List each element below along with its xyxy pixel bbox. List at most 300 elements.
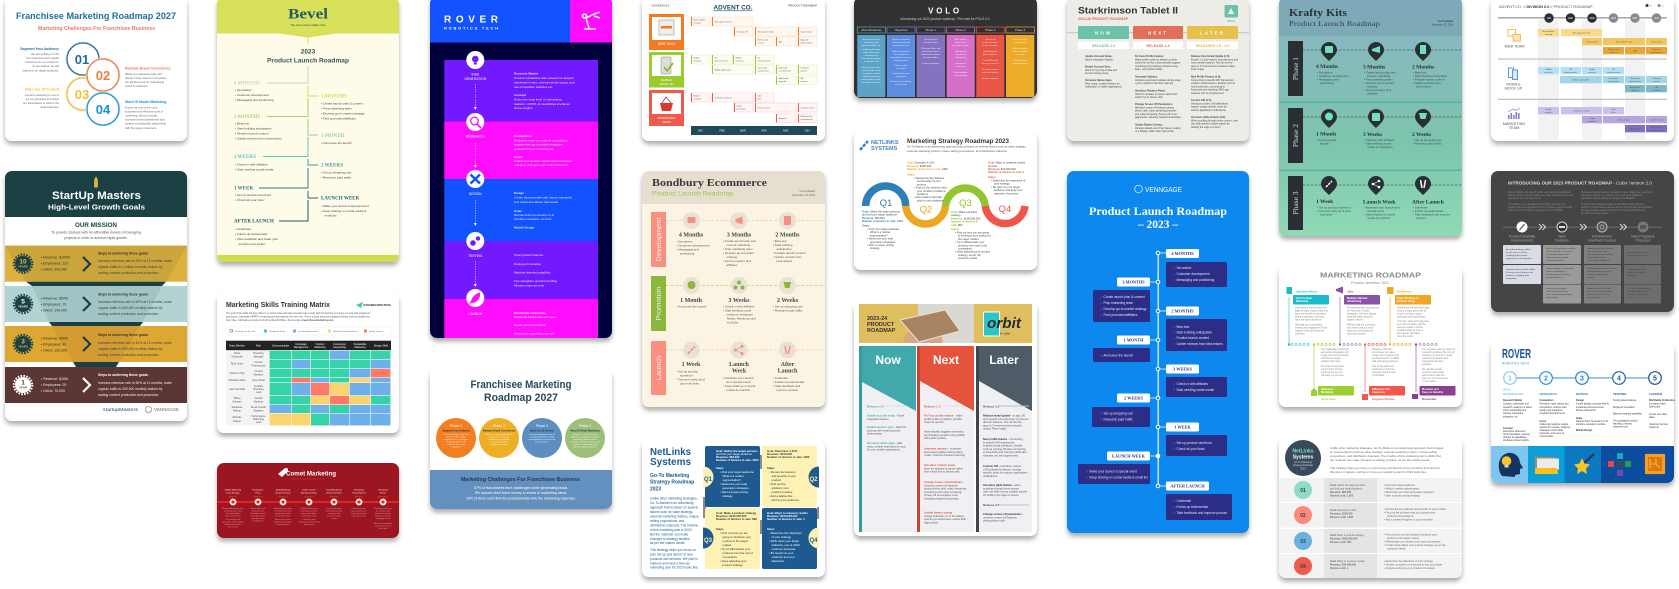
Q3 text: customer needs. (958, 256, 978, 260)
column: now (859, 346, 916, 532)
milestone bullets: • Celebrate (1413, 206, 1428, 210)
matrix table: Dolores Virgil (230, 372, 245, 375)
team label: marketing: TEAM (1509, 126, 1519, 130)
gantt labels: Bug and (1653, 49, 1661, 51)
panel: Volo phases: Objectives (894, 28, 908, 32)
lower text: products, as well as in-depth (1422, 354, 1453, 357)
Q4 text: audience and keep your (994, 188, 1023, 192)
upper text: and get reviews, content (1397, 326, 1423, 329)
month axis: APR (761, 128, 767, 132)
Q2 text: problems. (917, 192, 929, 196)
milestone details: operations and marketing (222, 520, 244, 524)
phase circles: Word Of Mouth Marketing (570, 430, 600, 432)
column text: roadmap phase (1012, 62, 1028, 65)
task labels: Revamp UX (736, 32, 748, 34)
stage text: of Eden AI capabilities (1503, 436, 1527, 439)
upper text: Viral content can be easily the (1295, 306, 1328, 310)
icon: robot arm (582, 12, 600, 29)
milestone bullets: email list (324, 214, 337, 218)
steps text: • What is market segmentation (1384, 486, 1420, 490)
matrix table: Performance (251, 415, 266, 418)
panel: Venngage product launch roadmap: 4 MONTHS (1171, 251, 1194, 256)
gantt labels: Automate (1631, 77, 1640, 80)
panel: Bondbury Ecommerce roadmap (642, 171, 825, 407)
column: next: and tracking contacts using CRMs (924, 433, 965, 437)
milestone headings (679, 232, 800, 374)
task box text: ✓ Set up shopping cart (1100, 412, 1133, 416)
stage text: design and marketing (1540, 409, 1563, 412)
upper text: improved product. (1347, 332, 1366, 336)
feature box text: and module. (1546, 297, 1558, 299)
map pins (1321, 42, 1431, 195)
column text: to our platform (894, 53, 908, 56)
task box text: ✓ Customer development (1173, 272, 1210, 276)
stage text: use competition statistics etc. (514, 85, 553, 89)
column text: now: notification on native applications. (1085, 86, 1123, 89)
icon: coloured squares (1608, 453, 1631, 476)
stage text: Assessing marketing channels (514, 332, 555, 336)
feature box text: An updated design will be (1506, 248, 1532, 251)
milestones: LAUNCH WEEK (321, 196, 359, 202)
intro: external marketing metrics, unique selling propositions, and distribution channels. (907, 149, 1008, 153)
stepper line (1510, 376, 1655, 379)
feature box text: Develop a plan to enter (1627, 251, 1650, 254)
band: 5 years: • DAUs: 140,000 (41, 308, 67, 312)
task box text: ✓ Prep marketing team (1100, 301, 1133, 305)
column: now: for your mobile applications. (867, 448, 901, 452)
month axis (691, 126, 817, 135)
feature box text: experience and navigation. (1506, 257, 1533, 260)
lower text: Our marketing experts will (1321, 348, 1349, 351)
feature box text: and enhancement for (1627, 290, 1648, 293)
steps text: • Find out how you are going to introduce your (1384, 532, 1437, 536)
column: later (976, 346, 1032, 532)
column text: and case studies (982, 71, 999, 74)
gantt labels: improvements (1607, 71, 1620, 74)
brand circle (1285, 440, 1321, 476)
intro: Go-To-Market is an advertising approach that is based on several factors such as value strategy, (907, 144, 1026, 148)
column text: later: holding the edge of screen. (1191, 126, 1221, 129)
panel: StartUp Masters growth goals (5, 171, 187, 421)
milestone headings: 2 Weeks (1412, 132, 1431, 138)
milestone headings: Launch Week (1363, 200, 1396, 206)
period icons and labels: November (1397, 290, 1413, 294)
panel: Advent Co. gantt roadmap (1491, 0, 1674, 141)
band: 3 years: organic traffic to 500,000 monthly visitors by (98, 347, 163, 351)
milestone bullets: • Advertise your launch as a (1364, 206, 1400, 210)
process chevrons (1539, 224, 1626, 230)
lower text: with advertising partners (1372, 360, 1399, 363)
feature box text: to existing database files (1546, 253, 1571, 256)
phase tabs: Phase 1 (1291, 57, 1300, 80)
quadrant Q4 (762, 508, 819, 569)
milestone bullets: • Check in with affiliates (1364, 138, 1395, 142)
phase circles: Make Use Of Content (530, 430, 554, 432)
task labels: Sort (758, 94, 762, 98)
upper text: have the same audience. (1295, 318, 1322, 322)
upper text: on Facebook, Twitter, (1347, 310, 1370, 312)
text: maintain brand consistency: While our marketing team will (125, 72, 162, 76)
icon: folder (1535, 457, 1559, 474)
Q3 text: to introduce your product to (958, 234, 991, 238)
lower text: and use new consumers (1422, 377, 1449, 380)
stage text: Testing latest features (1613, 399, 1637, 402)
title: Krafty Kits (1289, 7, 1348, 19)
quadrant Q3: Number of devices in sale: 880 (716, 517, 757, 521)
feature box text: Built-in de-duplication modules (1546, 247, 1577, 250)
header: ~ DIVISION 6.0 (650, 4, 670, 8)
gantt labels: Site page structure (1573, 32, 1591, 34)
column text: engineering (955, 56, 967, 59)
gantt labels: Application (1630, 86, 1641, 89)
milestone details: project plan review (375, 512, 392, 515)
lower text: an increase our sales, (1372, 351, 1396, 354)
intro text: customers from the same of its. (1508, 197, 1542, 200)
milestone bullets: • Develop go-to-market strategy (321, 112, 365, 116)
quadrant Q1: and find your target audience (716, 452, 753, 456)
stage text: interfaces share insights (1503, 439, 1530, 442)
milestone bullets: • Keep sharing on social media & (321, 209, 367, 213)
stage text: Deployed innovation (514, 262, 542, 266)
panel: Advent Co. team roadmap (642, 0, 825, 141)
feature box text: Additional new admin features (1587, 267, 1617, 270)
band: 3 years: 3 (21, 338, 25, 346)
phase circles: our top priorities as it helps (530, 436, 554, 438)
feature box text: will be available. It connects (1546, 250, 1574, 253)
last updated (1432, 20, 1454, 26)
logo (860, 140, 899, 152)
period icons and labels: December (1422, 397, 1437, 401)
stage text: sales (1649, 416, 1655, 419)
milestone details (222, 507, 392, 530)
band: 1 year: • Employees: 20 (41, 383, 66, 387)
icon glyphs (688, 216, 791, 355)
text: make use of content: our franchisees to rank in the (23, 101, 59, 105)
Q2 text: Number of devices in sale: 1363 (907, 168, 948, 171)
Q2 text: Revenue: $150,000 (907, 165, 931, 168)
column text: Feature adoption (982, 77, 999, 80)
Q3 text: • Keep adjusting your product (955, 250, 990, 254)
body text: changes to strategy anytime (650, 537, 690, 541)
column text: now: Introduce Native Apps: (1085, 79, 1112, 82)
milestone pills (1107, 249, 1209, 490)
lower text: and find our target (1321, 357, 1341, 360)
panel: Venngage product launch roadmap: 1 WEEK (1174, 424, 1191, 430)
milestones: AFTER LAUNCH (234, 220, 274, 224)
Q1 text: strategy. (870, 246, 880, 250)
column text: and feature reviews (921, 53, 941, 56)
stage text: product/UX/cost modeling etc. (514, 147, 554, 151)
band: 3 years: Steps to achieving these goals: (98, 333, 149, 337)
panel: Rover robotics stages: 3 (1580, 376, 1584, 382)
quarter badges: 03 (1300, 539, 1306, 545)
column text: from customers (1013, 50, 1029, 53)
quadrant Q2: and benefits of your (772, 474, 796, 478)
stage text: and responsive Rover framework. (514, 200, 559, 204)
logo (356, 302, 392, 308)
task box text: ✓ Keep sharing on social media & email list (1086, 476, 1148, 480)
column: now: Release 1.0 (867, 404, 884, 408)
milestone bullets: • Find promoters and (1364, 88, 1391, 92)
stage text: Narrow down Hi-versions to fit (514, 213, 554, 217)
column: later: minimize screen-off features (983, 515, 1017, 519)
milestone bullets: • Customer development (676, 244, 710, 248)
quadrant Q1: strategy. (722, 494, 733, 498)
header tint (1279, 0, 1462, 36)
body text: distribution channels. The timeline (650, 524, 698, 528)
column text: Marketing and (983, 50, 998, 53)
phase circles: customers for our products. (443, 438, 469, 441)
task labels: Ordering (800, 66, 809, 70)
node icons (469, 56, 481, 304)
column: later: scrolling through home screen, (983, 486, 1020, 490)
phase circles: Known as one of the most (573, 433, 597, 436)
pills: Keep on Benefits (1422, 390, 1444, 394)
lower text: Our company has the option of (1422, 348, 1455, 351)
text: maintain brand consistency: always travel, tools for innovation, (125, 76, 167, 80)
stage text: analyze their go-to-market strategies (514, 142, 563, 146)
Q2 text: Steps: (907, 172, 915, 176)
milestone bullets: • Create launch plan & content (321, 102, 363, 106)
column text: in the year with (864, 60, 879, 63)
band: 5 years: • Employees: 70 (41, 302, 66, 306)
panel: Volo phases: Phase 3 (985, 28, 996, 32)
subheading: Marketing Challenges For Franchisee Business (38, 26, 155, 32)
milestone details: group speech and (351, 510, 367, 512)
body text: This strategy helps you focus on (650, 548, 696, 552)
brand (650, 446, 691, 468)
milestone bullets: storefront (680, 374, 693, 378)
gantt labels: upgrade (1631, 89, 1640, 92)
stage text: Worldwide Conference (1649, 399, 1676, 402)
milestone labels: Marketing (354, 488, 364, 492)
milestone headings: 1 Month (1316, 132, 1336, 138)
Q3 text: Steps: (951, 227, 959, 231)
gantt labels: Legal (1589, 118, 1595, 120)
title: Comet Marketing (286, 472, 336, 478)
stage text: Collect and analyze market (1540, 423, 1569, 426)
milestone headings: 2 Months (1412, 64, 1434, 70)
column text: to the needs of our (862, 69, 881, 72)
matrix table: Chloe (234, 352, 241, 355)
column text: later: more private features. Run all the live (1191, 62, 1233, 65)
feature box text: and the ability to monitor (1587, 270, 1611, 273)
column: later: specific tones for various applications (983, 471, 1028, 475)
phase tabs (651, 212, 666, 395)
table rows (1279, 478, 1462, 578)
text: segment your audience: To get started, we will (32, 64, 59, 68)
footer logos: startupMasters (103, 407, 138, 412)
milestone details: team processes (251, 517, 265, 520)
task labels: Customer contacts (714, 96, 732, 100)
column: next: opening a touchscreen, earlier than (924, 517, 967, 521)
last updated: November 15, 2024 (792, 193, 816, 197)
bottom heading: Marketing Challenges For Franchisee Business (461, 477, 580, 483)
quadrant Q2: pitch to your audience. (772, 498, 800, 502)
feature box text: integration. (1506, 277, 1517, 280)
quadrant Q3: • Keep adjusting your (720, 559, 747, 563)
milestone headings: Launch (778, 368, 798, 374)
quadrant Q4: Steps (767, 527, 775, 531)
text: word of mouth marketing: marketing. Word of mouth (125, 114, 158, 118)
milestone headings: After (781, 362, 795, 368)
upper text: have the benefit of increased (1295, 312, 1326, 316)
pills: Advertising (1347, 299, 1362, 303)
subtitle: Marketing roadmap 2025 to 2028 (292, 478, 325, 480)
steps text: • Analyze and know your channel of success (1384, 566, 1436, 570)
matrix table: Marketer (254, 410, 264, 412)
text: word of mouth marketing: Word Of Mouth Marketing (125, 100, 166, 104)
quadrant Q4: • Determine the objectives (769, 531, 802, 535)
column: now: Introduce native apps - after (867, 442, 903, 445)
gantt bars: mobile (1538, 67, 1667, 92)
milestone bullets: • Check in with affiliates (235, 162, 268, 166)
body text: But the marketer can make (650, 532, 688, 536)
stage text: Scale (514, 209, 522, 213)
milestone headings: Launch (729, 362, 749, 368)
brand circle: Strategy Roadmap (1293, 464, 1314, 467)
column text: later: Face image. (1191, 68, 1205, 71)
month axis: FEB (719, 128, 725, 132)
milestone details: for all team roles (327, 514, 341, 518)
title: VOLO (928, 6, 962, 16)
upper text: good guest, ultimately (1397, 332, 1421, 335)
column: later: such as running off sites connecting (983, 447, 1026, 451)
column: later: Release 2.0 (983, 503, 1000, 507)
milestone labels: Install Marketing (326, 488, 342, 492)
milestone headings: Week (732, 368, 747, 374)
pills: Influencer Ads (1372, 387, 1390, 391)
feature box text: simplifying the overall (1506, 254, 1527, 257)
gantt labels: Sort (1612, 108, 1616, 111)
column text: now: Native integration feature. (1085, 58, 1114, 61)
stepper nodes (1504, 372, 1661, 384)
last updated (792, 189, 816, 197)
body text: selling propositions, and (650, 519, 684, 523)
stage text: sectors for reviews, mapping (1540, 426, 1571, 429)
phase circles: franchise with regular (446, 436, 466, 438)
milestone bullets: media on Instagram (1367, 145, 1393, 149)
body text: Go-To-Market is an advertising (650, 501, 694, 505)
panel: Comet Marketing timeline (217, 463, 399, 538)
gantt labels: improvement (1650, 51, 1663, 54)
column text: plans for 2023, our (862, 44, 881, 47)
text: segment your audience: customers for our products. (25, 60, 59, 64)
matrix table: Marketing (355, 346, 366, 349)
column: later: and expand, host directory of previous (983, 417, 1029, 421)
column headers (857, 27, 1034, 33)
milestone bullets: special event (1367, 209, 1384, 213)
band: 1 year: YEAR (19, 386, 27, 390)
band: 10 years: Increase retention rate to 90% at 12 months, scale (98, 259, 172, 263)
column: next: notes for service. (924, 420, 945, 424)
phase circles: We are looking to both from (443, 433, 469, 436)
logo: PEAK (1227, 19, 1235, 23)
stage labels: RESEARCH (466, 134, 485, 138)
icon: rocket (94, 176, 98, 188)
task bars: mobile (691, 55, 817, 84)
matrix table: Team Member (229, 344, 245, 348)
task bars: web (691, 17, 817, 46)
milestone details: and timelines (252, 520, 264, 522)
milestone bullets: • Check all your links! (235, 198, 265, 202)
Q3 text: Goal: Make a product (951, 211, 977, 214)
milestone labels: Group Promotion (326, 492, 343, 494)
milestone bullets: • Start building (773, 243, 793, 247)
column text: Improve customer (892, 38, 910, 41)
column text: Launch the (985, 38, 996, 41)
column bodies (857, 35, 1034, 97)
header: ADVENT CO. // DIVISION 6.0 // PRODUCT ROADMAP (1499, 5, 1593, 9)
milestone bullets: strategy (726, 255, 738, 259)
panel: Venngage product launch roadmap: 3 WEEKS (1173, 366, 1193, 372)
band: 5 years (5, 286, 187, 326)
goals text: Devices sold: 1,363 (1330, 494, 1354, 498)
body text: as per the market needs. (650, 541, 685, 545)
column: next: automated updates during sleep (924, 450, 963, 454)
intro text: the current pricing system. (1581, 212, 1609, 215)
milestone labels: Marketing Group (301, 492, 318, 494)
milestone details: marketing and sales (301, 510, 318, 512)
stage text: research, analyze on latest (1503, 406, 1532, 409)
quadrant Q1: Goal: Define the target persons (716, 449, 758, 453)
Q4 text: Revenue: $10,000,000 (988, 168, 1016, 171)
milestone details: marketing and sales (326, 510, 343, 512)
brand circle: Go-To Marketing (1294, 461, 1313, 464)
Q4 text: • Determine the objectives of (991, 178, 1026, 182)
column text: next: aggressive, including reward functionality. (1135, 116, 1181, 119)
stage buttons: LATER (1200, 30, 1225, 36)
panel: Franchisee Marketing Roadmap circles (5, 0, 187, 141)
column text: retention and build (892, 41, 911, 44)
milestone bullets: content marketing (726, 243, 751, 247)
matrix table: Role (256, 344, 262, 348)
milestone headings: 3 Weeks (728, 298, 750, 304)
subtitle: Product Launch Roadmap (1289, 19, 1380, 28)
matrix table: Lead (256, 391, 262, 394)
milestone details: and budget review (250, 512, 266, 515)
month axis: JAN (1547, 17, 1552, 20)
upper text: brand recognition, trust and (1295, 316, 1325, 318)
subtitle: Strategy Roadmap (650, 480, 694, 486)
phase circles: While our marketing team will (485, 433, 513, 436)
icon circles (683, 212, 796, 358)
column: later: apps in 3 environments included (983, 423, 1022, 427)
panel: Venngage product launch roadmap (1067, 171, 1249, 533)
process labels: Improvements (1511, 238, 1533, 242)
feature box text: for the users of Cubix, (1506, 251, 1528, 254)
team block: web (649, 14, 684, 50)
title: Marketing Skills Training Matrix (226, 300, 331, 309)
Q4 text: • Be clear on your target (991, 185, 1020, 189)
gantt labels: promotion (1587, 120, 1597, 123)
column: next: Automatically suggest monitoring (924, 430, 964, 434)
milestones: 2 MONTHS (234, 115, 260, 120)
band: 5 years: YEARS (18, 304, 28, 308)
steps text: • Determine the objectives of your strategy (1384, 559, 1433, 563)
task labels: UX (714, 58, 718, 60)
stage text: channels (1649, 426, 1659, 429)
stage labels (1503, 388, 1663, 396)
gantt labels: Ordering (1652, 77, 1661, 80)
column text: new feature specs (922, 50, 941, 53)
column text: next: Change Screen-Off Parameters: (1135, 103, 1173, 106)
task box text: ✓ Gather reviews from beta testers (1173, 342, 1223, 346)
milestone bullets: • Gather reviews from (1413, 81, 1441, 85)
milestone bullets: • Set up shopping cart (321, 170, 351, 174)
upper text: and serve a way to track (1347, 326, 1374, 330)
task box text: ✓ Research paid traffic (1100, 418, 1133, 422)
